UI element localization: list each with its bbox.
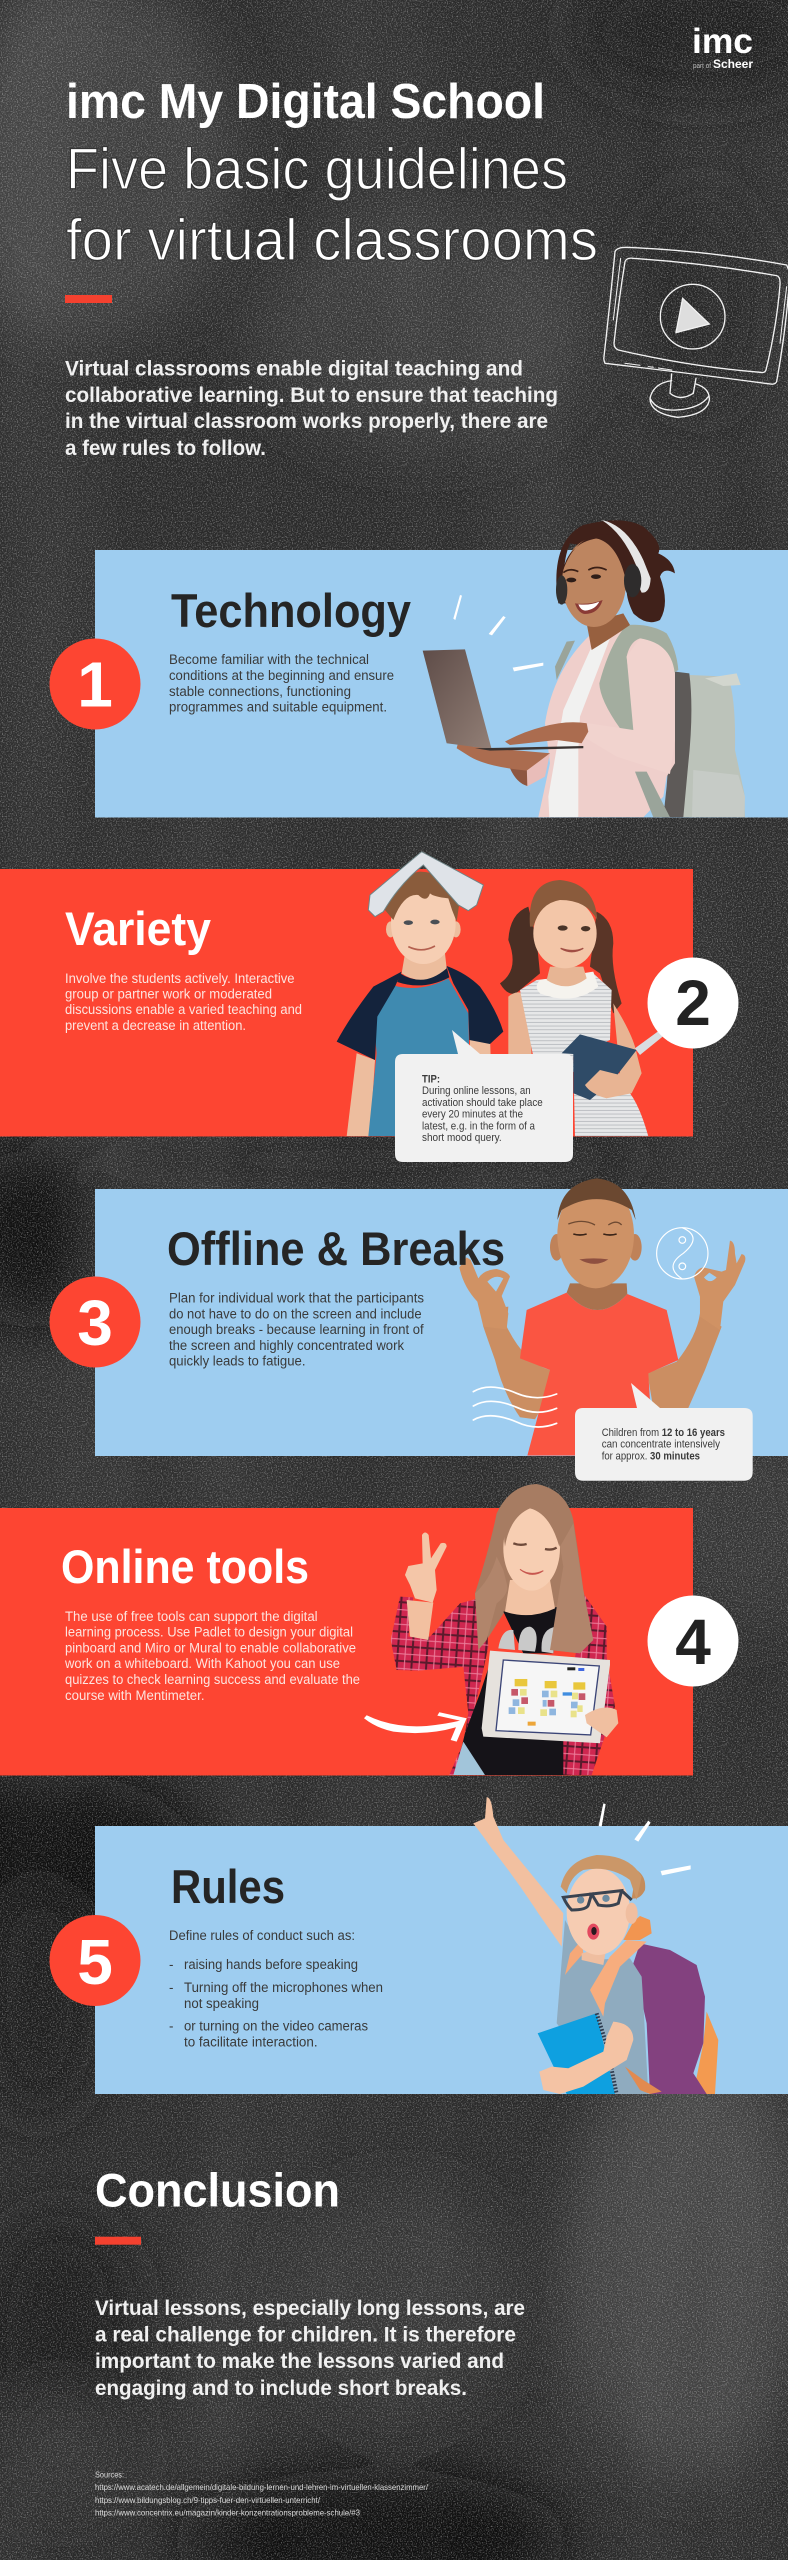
body text: learning process. Use Padlet to design your digital	[65, 1625, 353, 1640]
number badge 3: 3	[77, 1287, 113, 1359]
body text: stable connections, functioning	[169, 684, 351, 699]
logo: imc part of Scheer: imc	[692, 22, 753, 61]
body text: group or partner work or moderated	[65, 986, 272, 1002]
panel background	[95, 1189, 788, 1456]
intro text: in the virtual classroom works properly, there are	[65, 410, 548, 433]
heading: Online tools	[61, 1540, 309, 1593]
body text: Become familiar with the technical	[169, 652, 369, 667]
body text: prevent a decrease in attention.	[65, 1018, 246, 1033]
number badge 3	[50, 1276, 140, 1368]
body text: The use of free tools can support the digital	[65, 1609, 318, 1624]
number badge 5: 5	[77, 1926, 113, 1998]
photo: boy with book on head and girl with book	[337, 852, 663, 1136]
body text	[169, 652, 394, 714]
body text: the screen and highly concentrated work	[169, 1338, 404, 1353]
sources: https://www.acatech.de/allgemein/digitale-bildung-lernen-und-lehren-im-virtuellen-klassenzimmer/	[95, 2483, 429, 2492]
panel 4: online tools	[0, 1484, 738, 1776]
icon: chalk monitor with play button	[604, 247, 788, 417]
intro text: Virtual classrooms enable digital teaching and	[65, 358, 523, 380]
body text: Define rules of conduct such as:	[169, 1928, 355, 1943]
number badge 5	[50, 1915, 140, 2006]
number badge 2	[648, 958, 738, 1048]
intro text: a few rules to follow.	[65, 437, 266, 460]
callout: tip: short mood query.	[422, 1132, 502, 1144]
body text: pinboard and Miro or Mural to enable collaborative	[65, 1641, 356, 1656]
photo: girl with laptop and headphones	[423, 520, 745, 817]
body text: discussions enable a varied teaching and	[65, 1002, 302, 1017]
photo: meditating boy in red shirt	[459, 1178, 745, 1456]
body text	[64, 1609, 360, 1703]
conclusion text: engaging and to include short breaks.	[95, 2377, 467, 2400]
body text: to facilitate interaction.	[184, 2035, 318, 2050]
body text: work on a whiteboard. With Kahoot you can use	[64, 1656, 340, 1671]
panel background	[95, 1826, 788, 2094]
title	[66, 75, 598, 273]
conclusion text: important to make the lessons varied and	[95, 2350, 504, 2373]
body text: Plan for individual work that the participants	[169, 1290, 424, 1306]
body text: Involve the students actively. Interactive	[65, 971, 294, 986]
body text	[169, 1290, 424, 1369]
title: imc My Digital School	[66, 75, 545, 129]
heading: Rules	[171, 1860, 285, 1913]
callout: concentration span: for approx. 30 minutes	[602, 1451, 700, 1463]
body text: programmes and suitable equipment.	[169, 700, 387, 714]
body text: course with Mentimeter.	[65, 1688, 204, 1703]
panel 1: technology	[50, 520, 788, 818]
photo: girl with glasses and backpack raising hand	[473, 1797, 718, 2094]
number badge 4	[648, 1596, 738, 1686]
intro text	[65, 358, 558, 460]
conclusion heading: Conclusion	[95, 2164, 340, 2217]
sources: Sources:	[95, 2471, 124, 2480]
panel background	[0, 1508, 693, 1776]
title: Five basic guidelines	[66, 137, 568, 202]
conclusion text: a real challenge for children. It is therefore	[95, 2324, 516, 2347]
callout: tip: activation should take place	[422, 1097, 543, 1109]
body text: quizzes to check learning success and evaluate the	[65, 1672, 360, 1687]
body text: or turning on the video cameras	[184, 2019, 368, 2034]
heading: Variety	[65, 902, 211, 955]
sources	[95, 2471, 429, 2518]
callout: tip: every 20 minutes at the	[422, 1109, 523, 1121]
body text	[169, 1928, 383, 2050]
sources: https://www.bildungsblog.ch/9-tipps-fuer-den-virtuellen-unterricht/	[95, 2496, 321, 2505]
number badge 4: 4	[675, 1606, 711, 1678]
body text: -	[169, 2019, 173, 2034]
intro text: collaborative learning. But to ensure that teaching	[65, 384, 558, 407]
conclusion text	[95, 2297, 525, 2400]
photo: girl with tablet making peace sign	[364, 1484, 618, 1775]
body text: not speaking	[184, 1996, 259, 2011]
body text: conditions at the beginning and ensure	[169, 668, 394, 683]
panel 5: rules	[50, 1797, 788, 2094]
number badge 1: 1	[77, 648, 113, 720]
sources: https://www.concentrix.eu/magazin/kinder-konzentrationsprobleme-schule/#3	[95, 2509, 360, 2518]
body text: do not have to do on the screen and include	[169, 1306, 422, 1321]
body text: quickly leads to fatigue.	[169, 1354, 306, 1369]
body text: Turning off the microphones when	[184, 1980, 383, 1995]
callout: concentration span	[575, 1383, 753, 1481]
body text	[65, 971, 302, 1033]
heading: Offline & Breaks	[167, 1222, 505, 1275]
red accent bar	[65, 295, 112, 303]
conclusion text: Virtual lessons, especially long lessons, are	[95, 2297, 525, 2320]
callout: tip: During online lessons, an	[422, 1085, 531, 1097]
body text: -	[169, 1957, 173, 1972]
heading: Technology	[171, 584, 411, 637]
callout: concentration span: can concentrate intensively	[602, 1439, 721, 1451]
callout: concentration span: Children from 12 to 16 years	[602, 1427, 725, 1439]
title: for virtual classrooms	[66, 208, 598, 273]
logo: imc part of Scheer: Scheer	[713, 59, 754, 71]
body text: enough breaks - because learning in front of	[169, 1322, 424, 1337]
body text: raising hands before speaking	[184, 1957, 358, 1972]
red accent bar	[95, 2237, 141, 2245]
panel 3: offline and breaks	[50, 1178, 788, 1481]
callout: tip	[395, 1030, 573, 1162]
logo: imc part of Scheer: part of	[693, 63, 711, 70]
number badge 2: 2	[675, 967, 711, 1039]
panel 2: variety	[0, 852, 738, 1162]
callout: tip: TIP:	[422, 1073, 440, 1085]
panel background	[95, 550, 788, 818]
number badge 1	[50, 638, 140, 730]
panel background	[0, 869, 693, 1136]
body text: -	[169, 1980, 173, 1995]
callout: tip: latest, e.g. in the form of a	[422, 1121, 535, 1133]
